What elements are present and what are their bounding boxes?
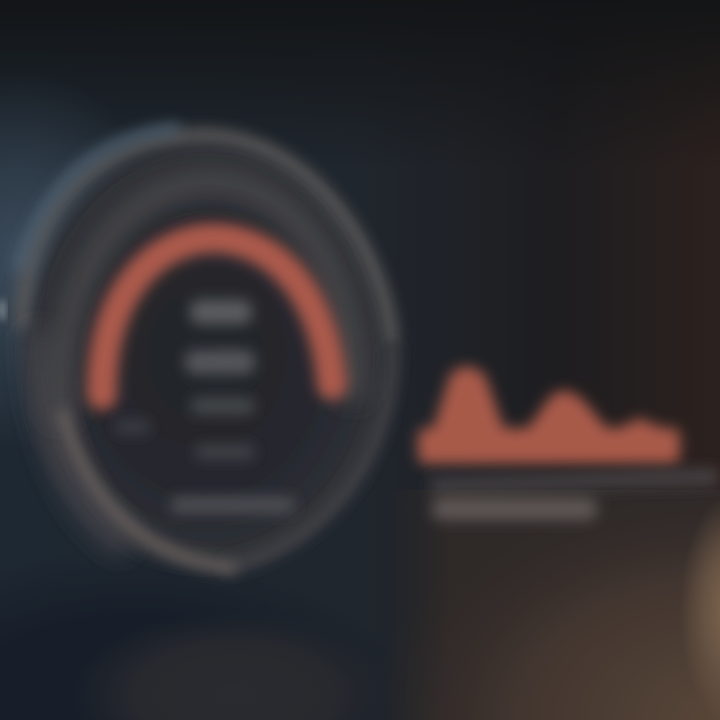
table surface at lower right	[370, 480, 720, 720]
dial face	[25, 143, 385, 567]
outer blue rim	[18, 128, 180, 270]
grey chart caption	[430, 468, 718, 520]
left ring	[40, 330, 130, 545]
inner ring	[60, 182, 353, 420]
lower ring sweep	[62, 410, 235, 568]
orange bar chart	[418, 366, 680, 464]
gauge dial	[18, 128, 392, 568]
right ring shade	[225, 345, 392, 568]
outer ring	[22, 135, 392, 345]
centre text blobs	[115, 300, 295, 513]
red gauge arc	[102, 238, 332, 395]
gauge pedestal	[70, 610, 400, 720]
